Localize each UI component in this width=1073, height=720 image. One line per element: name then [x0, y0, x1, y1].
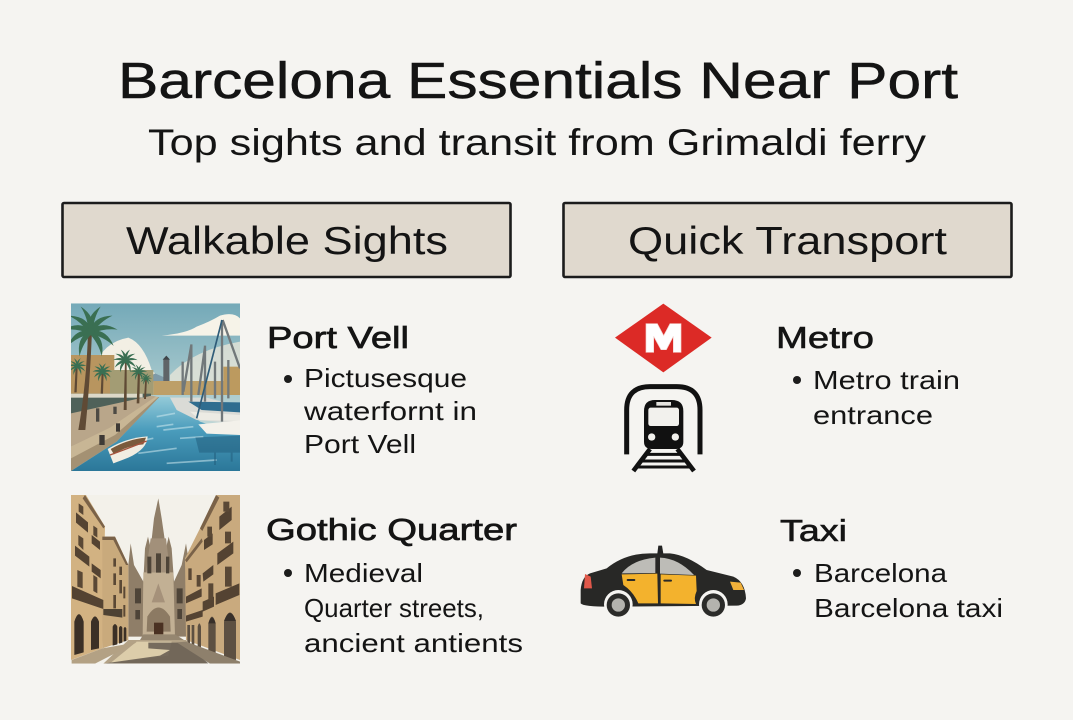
title: Barcelona Essentials Near Port	[118, 52, 958, 109]
heading: walkable sights: Walkable Sights	[126, 220, 448, 263]
icon: taxi	[581, 546, 746, 619]
icon: metro train in tunnel	[627, 387, 700, 471]
heading: quick transport: Quick Transport	[628, 220, 947, 263]
heading: quick transport	[564, 203, 1012, 277]
bullet text: Port Vell: Port Vell	[304, 429, 416, 459]
label: Gothic Quarter	[266, 512, 523, 658]
heading: walkable sights	[62, 203, 510, 277]
bullet text: Gothic Quarter: Medieval	[304, 558, 423, 588]
label: Gothic Quarter: Gothic Quarter	[266, 512, 517, 547]
bullet text: Port Vell: Pictusesque	[304, 363, 467, 393]
bullet text: Port Vell: waterfornt in	[303, 396, 477, 426]
panel: quick transport	[564, 203, 1012, 623]
bullet text: Metro: Metro train	[813, 365, 960, 395]
bullet text: Gothic Quarter: Quarter streets,	[304, 593, 484, 623]
image: Gothic Quarter street	[71, 495, 240, 664]
bullet text: Gothic Quarter	[284, 558, 523, 658]
bullet text: Taxi	[793, 558, 1003, 623]
label: Taxi	[780, 513, 1003, 623]
subtitle: Top sights and transit from Grimaldi ferry	[148, 122, 927, 163]
label: Port Vell: Port Vell	[267, 320, 409, 355]
panel: walkable sights	[62, 203, 523, 664]
bullet text: Metro: entrance	[813, 400, 933, 430]
bullet text: Gothic Quarter: ancient antients	[304, 628, 523, 658]
bullet text: Taxi: Barcelona taxi	[814, 593, 1003, 623]
label: Taxi: Taxi	[780, 513, 847, 548]
bullet text: Port Vell	[284, 363, 477, 459]
icon: metro diamond logo	[615, 304, 712, 372]
image: Port Vell marina	[64, 303, 240, 471]
label: Port Vell	[267, 320, 477, 459]
bullet text: Metro	[793, 365, 960, 430]
label: Metro	[776, 320, 960, 430]
bullet text: Taxi: Barcelona	[814, 558, 948, 588]
label: Metro: Metro	[776, 320, 874, 355]
